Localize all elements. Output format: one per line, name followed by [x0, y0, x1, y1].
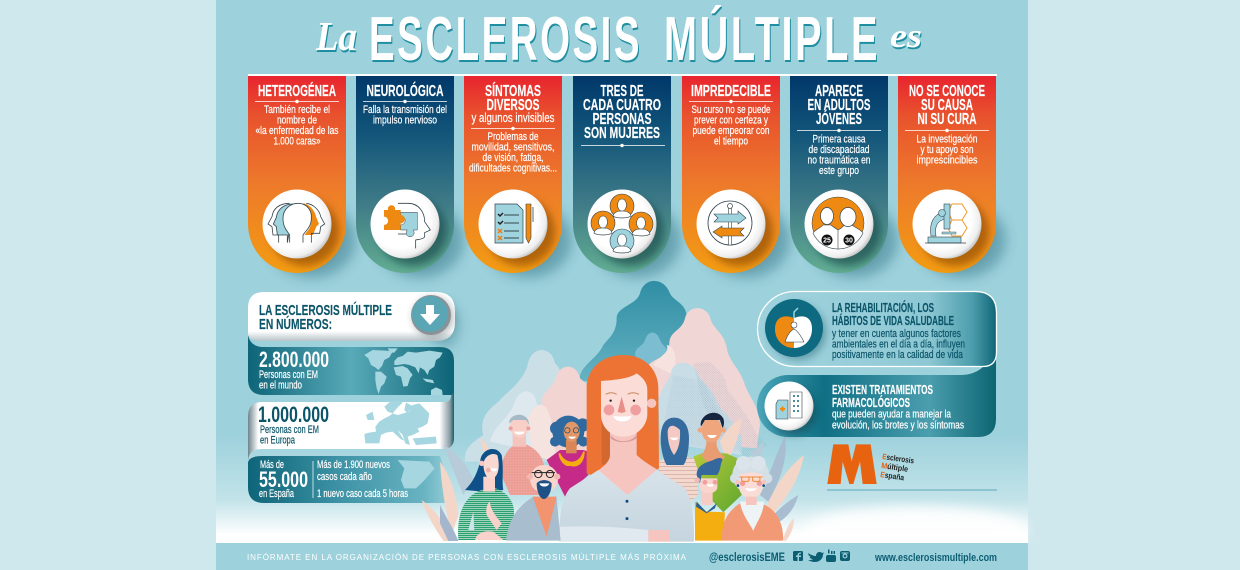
- icon: puzzle head: [384, 203, 430, 248]
- description: Problemas de: [488, 131, 538, 143]
- panel: aparece en adultos jóvenes: [790, 76, 898, 278]
- heading: NEUROLÓGICA: [366, 82, 444, 100]
- panel: no se conoce su causa: [898, 76, 1006, 278]
- title: MÚLTIPLE: [664, 5, 880, 74]
- heading: SÍNTOMAS: [485, 83, 541, 100]
- europe figure: Personas con EM: [260, 424, 319, 436]
- text: tratamientos: evolución, los brotes y los síntomas: [832, 420, 964, 432]
- text: tratamientos: [832, 382, 964, 432]
- heading: NO SE CONOCE: [909, 83, 985, 100]
- description: no traumática en: [808, 154, 870, 166]
- footer message: INFÓRMATE EN LA ORGANIZACIÓN DE PERSONAS CON ESCLEROSIS MÚLTIPLE MÁS PRÓXIMA: [247, 553, 687, 562]
- left hills: [465, 350, 587, 462]
- world map: [364, 348, 443, 395]
- description: imprescincibles: [916, 154, 978, 166]
- description: Primera causa: [812, 134, 866, 146]
- world figure: Personas con EM: [259, 369, 318, 381]
- logo: esclerosis múltiple españa: [827, 444, 997, 490]
- description: La investigación: [916, 134, 978, 146]
- description: prever con certeza y: [694, 114, 768, 126]
- new cases: [317, 459, 408, 500]
- logo: esclerosis múltiple españa: Esclerosis: [882, 452, 915, 465]
- text: rehabilitación: [832, 300, 965, 361]
- heading: [583, 83, 661, 142]
- icon: checklist and pen: [495, 204, 533, 243]
- pale hill with dots: [658, 363, 742, 455]
- description: 1.000 caras»: [274, 136, 320, 148]
- heading: [909, 83, 985, 128]
- panel: heterogénea: [248, 76, 356, 278]
- spain figure: 55.000: [259, 467, 308, 492]
- description: Falla la transmisión del: [363, 104, 447, 116]
- logo: esclerosis múltiple españa: España: [880, 470, 905, 482]
- description: de discapacidad: [808, 144, 870, 156]
- icon: down arrow button: [411, 295, 453, 337]
- text: rehabilitación: LA REHABILITACIÓN, LOS: [832, 300, 934, 315]
- text: rehabilitación: HÁBITOS DE VIDA SALUDABLE: [832, 313, 954, 328]
- spain figure: en España: [259, 488, 295, 500]
- heading: CADA CUATRO: [583, 97, 661, 114]
- text: tratamientos: EXISTEN TRATAMIENTOS: [832, 382, 933, 397]
- panel: tratamientos: [757, 352, 996, 437]
- new cases: casos cada año: [317, 471, 372, 483]
- icon: two young adults: 30: [845, 238, 853, 244]
- text: rehabilitación: positivamente en la calidad de vida: [832, 349, 964, 361]
- main woman: [559, 355, 694, 542]
- description: [469, 131, 557, 174]
- panel: en números: [248, 292, 459, 503]
- heading: SON MUJERES: [584, 125, 660, 142]
- icon: two young adults: 25: [823, 238, 831, 244]
- description: dificultades cognitivas...: [469, 162, 557, 174]
- panel: síntomas diversos: [464, 76, 572, 278]
- bald man with beard: [506, 465, 561, 541]
- panel: tres de cada cuatro: [573, 76, 681, 278]
- numbers header: [248, 292, 455, 341]
- panel: impredecible: [682, 76, 790, 278]
- europe band: [248, 392, 454, 462]
- twitter handle: @esclerosisEME: [709, 550, 785, 564]
- teal hill: [580, 281, 687, 382]
- illustration: group of people: [422, 281, 804, 542]
- heading: SU CAUSA: [921, 97, 973, 114]
- description: movilidad, sensitivos,: [472, 142, 554, 154]
- world figure: 2.800.000: [259, 347, 329, 372]
- description: [808, 134, 870, 177]
- description: [256, 104, 339, 148]
- europe figure: en Europa: [260, 434, 296, 446]
- heading: IMPREDECIBLE: [691, 83, 771, 100]
- spain band: [248, 456, 454, 503]
- website: www.esclerosismultiple.com: [874, 552, 997, 564]
- heading: [472, 83, 554, 125]
- man with dark hair: [693, 413, 742, 512]
- infographic panel background: [216, 0, 1028, 543]
- footer: [216, 543, 1028, 570]
- panel: neurológica: [356, 76, 464, 278]
- logo: esclerosis múltiple españa: Múltiple: [881, 461, 909, 474]
- description: y tu apoyo son: [920, 144, 974, 156]
- icon: medication: [764, 382, 817, 435]
- description: nombre de: [277, 114, 317, 126]
- social icons: [793, 550, 850, 562]
- leaves: [422, 418, 804, 542]
- heading: JÓVENES: [816, 110, 862, 128]
- icon: microscope and hexagons: [925, 204, 967, 243]
- description: También recibe el: [264, 104, 330, 116]
- woman with long blue hair: [658, 418, 698, 502]
- title: La: [315, 13, 357, 59]
- numbers heading: LA ESCLEROSIS MÚLTIPLE: [259, 301, 392, 319]
- spain figure: [259, 459, 308, 500]
- panel: rehabilitación: [758, 292, 996, 367]
- new cases: 1 nuevo caso cada 5 horas: [317, 488, 408, 500]
- icon: four people: [591, 194, 653, 253]
- icon: overlapping heads: [268, 203, 325, 243]
- description: puede empeorar con: [692, 125, 770, 137]
- text: rehabilitación: ambientales en el día a día, influyen: [832, 338, 965, 350]
- title: ESCLEROSIS: [369, 5, 642, 74]
- heading: APARECE: [815, 83, 863, 100]
- old woman: [722, 456, 783, 541]
- description: [916, 134, 978, 166]
- text: rehabilitación: y tener en cuenta algunos factores: [832, 328, 961, 340]
- heading: DIVERSOS: [486, 97, 540, 114]
- heading: PERSONAS: [592, 111, 652, 128]
- world figure: en el mundo: [259, 380, 302, 392]
- spain figure: Más de: [260, 459, 284, 471]
- heading: y algunos invisibles: [472, 111, 554, 125]
- europe figure: [258, 402, 329, 446]
- spain map: [398, 460, 435, 488]
- europe figure: 1.000.000: [258, 402, 329, 427]
- icon: apple: [765, 299, 826, 360]
- woman with curly hair: [547, 416, 589, 497]
- text: tratamientos: FARMACOLÓGICOS: [832, 395, 910, 410]
- man with grey hair: [500, 415, 547, 495]
- numbers heading: [259, 301, 392, 333]
- description: [363, 104, 447, 126]
- europe map: [364, 401, 437, 445]
- description: el tiempo: [714, 136, 748, 148]
- pink hill: [648, 308, 760, 448]
- heading: TRES DE: [600, 83, 644, 100]
- description: impulso nervioso: [373, 114, 437, 126]
- world band: [248, 335, 454, 395]
- numbers heading: EN NÚMEROS:: [259, 315, 332, 333]
- description: este grupo: [819, 165, 859, 177]
- description: [692, 104, 770, 148]
- description: Su curso no se puede: [692, 104, 770, 116]
- text: tratamientos: que pueden ayudar a manejar la: [832, 408, 952, 420]
- young man in yellow: [695, 458, 725, 541]
- heading: EN ADULTOS: [808, 97, 870, 114]
- icon: signpost: [708, 201, 752, 245]
- icon: two young adults: [812, 197, 864, 249]
- heading: [808, 83, 870, 128]
- new cases: Más de 1.900 nuevos: [317, 459, 390, 471]
- description: «la enfermedad de las: [256, 125, 339, 137]
- title: es: [890, 18, 922, 55]
- description: de visión, fatiga,: [482, 152, 544, 164]
- heading: HETEROGÉNEA: [258, 83, 336, 100]
- world figure: [259, 347, 329, 392]
- heading: NI SU CURA: [918, 111, 976, 128]
- woman in green stripes: [458, 449, 514, 540]
